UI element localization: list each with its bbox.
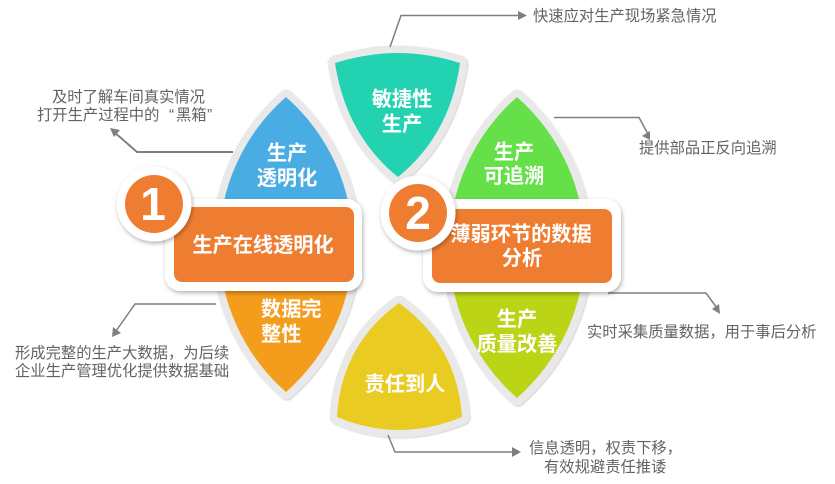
label: 敏捷性生产: 生产 bbox=[382, 113, 422, 136]
badge: number 2: 2 bbox=[405, 187, 431, 239]
label: 生产质量改善: 质量改善 bbox=[477, 333, 557, 356]
badge: number 2 bbox=[380, 176, 456, 250]
label: 生产可追溯: 可追溯 bbox=[484, 164, 544, 188]
note: 形成完整: 形成完整的生产大数据，为后续 bbox=[15, 345, 229, 362]
label: 生产透明化: 生产 bbox=[267, 142, 307, 165]
note: 及时了解: 黑箱 bbox=[176, 107, 207, 124]
badge: number 1: 1 bbox=[140, 178, 166, 230]
arrow: orange callout bbox=[112, 304, 216, 337]
note: 及时了解: ” bbox=[207, 107, 212, 124]
note: 提供部品: 提供部品正反向追溯 bbox=[639, 140, 777, 157]
note: 形成完整: 企业生产管理优化提供数据基础 bbox=[15, 362, 229, 380]
leaf: green 生产可追溯 bbox=[449, 90, 588, 199]
leaf: blue 生产透明化 bbox=[216, 90, 358, 203]
badge: number 1 bbox=[116, 166, 192, 242]
label: 数据完整性: 整性 bbox=[261, 323, 301, 346]
arrow: teal callout bbox=[390, 11, 527, 47]
note: 实时采集: 实时采集质量数据，用于事后分析 bbox=[587, 324, 816, 341]
heading: 薄弱环节的数据分析: 薄弱环节的数据 bbox=[450, 223, 592, 246]
note: 及时了解: 及时了解车间真实情况 bbox=[52, 88, 205, 106]
leaf: yellow 责任到人 bbox=[337, 303, 462, 430]
note: 及时了解: “ bbox=[169, 107, 174, 124]
leaf: lime 生产质量改善 bbox=[446, 292, 590, 407]
leaf: orange 数据完整性 bbox=[217, 287, 358, 401]
heading: 生产在线透明化: 生产在线透明化 bbox=[192, 234, 334, 257]
label: 敏捷性生产: 敏捷性 bbox=[372, 87, 432, 111]
note: 信息透明: 信息透明，权责下移， bbox=[529, 440, 682, 457]
arrow: green callout bbox=[554, 118, 650, 140]
panel: box 1 生产在线透明化 bbox=[165, 199, 362, 291]
panel: box 2 薄弱环节的数据分析 bbox=[423, 199, 621, 292]
arrow: lime callout bbox=[608, 293, 720, 314]
note: 及时了解: 打开生产过程中的 bbox=[37, 107, 159, 124]
label: 生产可追溯: 生产 bbox=[494, 141, 534, 164]
arrow: yellow callout bbox=[388, 435, 521, 457]
label: 责任到人: 责任到人 bbox=[365, 373, 445, 396]
note: 信息透明: 有效规避责任推诿 bbox=[544, 459, 666, 476]
label: 数据完整性: 数据完 bbox=[261, 297, 322, 321]
leaf: teal 敏捷性生产 bbox=[335, 53, 460, 177]
note: 快速应对: 快速应对生产现场紧急情况 bbox=[533, 7, 717, 25]
label: 生产透明化: 透明化 bbox=[257, 167, 317, 190]
label: 生产质量改善: 生产 bbox=[497, 308, 537, 331]
arrow: blue callout bbox=[110, 128, 233, 152]
heading: 薄弱环节的数据分析: 分析 bbox=[502, 247, 542, 270]
